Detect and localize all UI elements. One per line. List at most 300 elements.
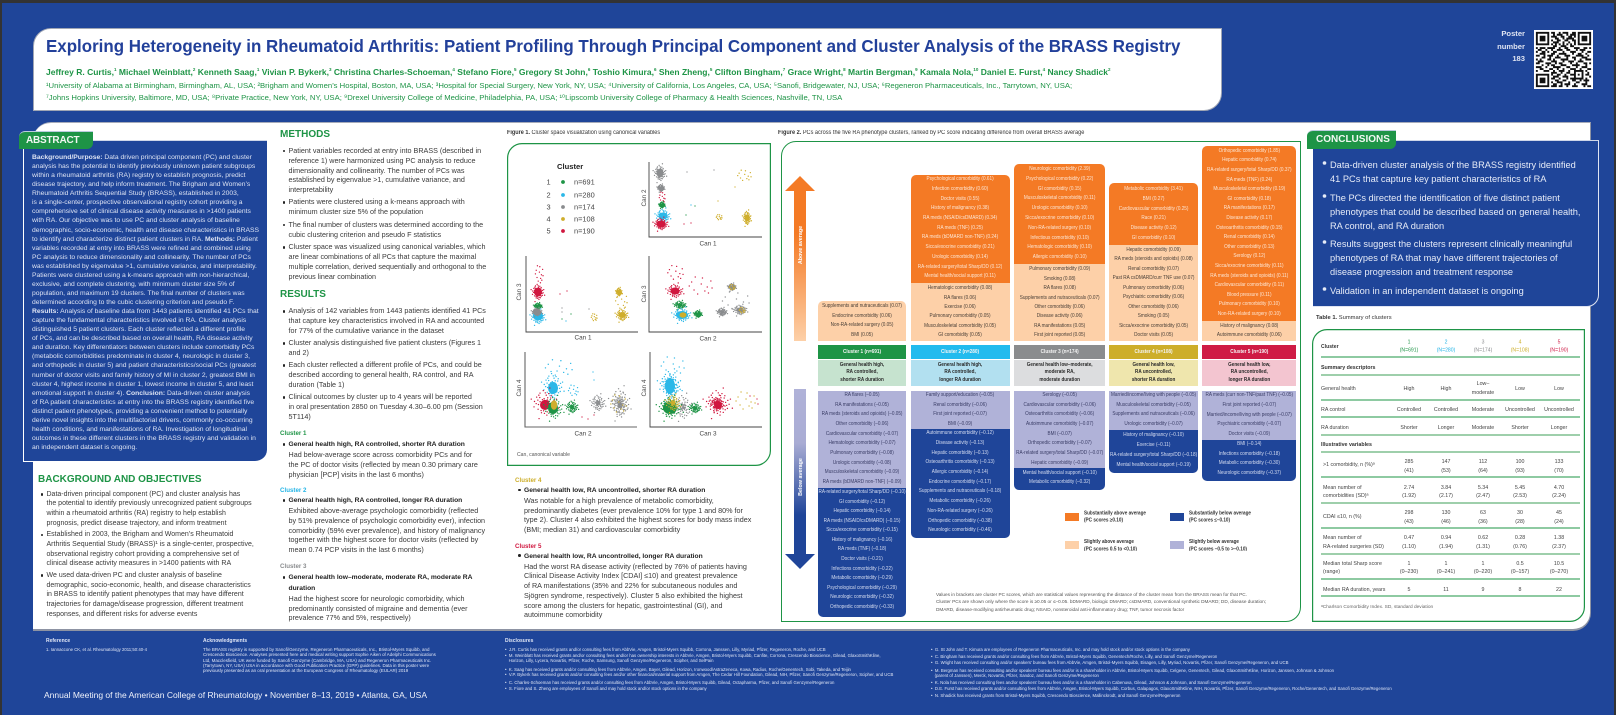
slightly above average PCs: Hepatic comorbidity (0.09) xyxy=(1126,247,1181,253)
summary descriptors: Moderate xyxy=(1472,407,1494,413)
bullet: objective: We used data-driven PC and cluster analysis of baseline xyxy=(46,572,222,579)
slightly above average PCs: Sicca/exocrine comorbidity (0.05) xyxy=(1119,323,1188,329)
slightly above average PCs: Smoking (0.05) xyxy=(1138,313,1169,319)
illustrative variables: (28) xyxy=(1515,519,1525,525)
illustrative variables: 100 xyxy=(1516,459,1524,465)
chart: can 4 vs can 3: Can 3 xyxy=(699,430,717,438)
substantially above average PCs xyxy=(911,175,1010,283)
figure 1 caption: Figure 1. Cluster space visualization using canonical variables xyxy=(507,130,660,136)
illustrative variables: 0.47 xyxy=(1404,535,1414,541)
legend: Substantially below average xyxy=(1189,511,1251,517)
bullet: cluster number: cubic clustering criterion and pseudo F statistics xyxy=(288,230,441,239)
bullet: predominantly diabetes (ever prevalence 10% for type 1 and 80% for xyxy=(524,506,743,515)
bullet: variables analysed: Analysis of 142 variables from 1443 patients identified 41 PCs xyxy=(288,306,486,315)
slightly above average PCs: Renal comorbidity (0.07) xyxy=(1128,266,1179,272)
abstract text: cluster 4, highest income in cluster 1, lowest income in cluster 5, and least xyxy=(32,381,253,388)
substantially above average PCs: RA manifestations (0.17) xyxy=(1223,205,1275,211)
substantially above average PCs: RA-related surgery/total Sharp/DD (0.37) xyxy=(1207,167,1291,173)
bullet: objective: responses, and different risks for adverse events xyxy=(46,611,197,618)
bullet: comorbidity (59% ever prevalence), and history of malignancy xyxy=(288,526,485,534)
slightly below average PCs: RA-related surgery/total Sharp/DD (–0.07) xyxy=(1016,450,1103,456)
disclosures column 1: • K. Saag has received grants and/or consulting fees from AbbVie, Amgen, Bayer, Gilead, Horizon, Ironwood/AstraZeneca, Kowa, Radius, Roche/Genentech, Sobi, Takeda, and Teijin xyxy=(505,667,851,672)
disclosures column 2: • C. Bingham has received grants and/or consulting fees from AbbVie, Bristol-Myers Squibb, Genentech/Roche, Lilly, and Sanofi Genzyme/Regeneron xyxy=(931,654,1217,659)
illustrative variables: (2.24) xyxy=(1552,493,1566,499)
slightly below average PCs: Hepatic comorbidity (–0.09) xyxy=(1031,460,1088,466)
bullet: outcomes xyxy=(288,392,483,422)
column: cluster 1 xyxy=(818,301,906,617)
slightly above average PCs: History of malignancy (0.08) xyxy=(1220,323,1278,329)
bullet: variables: interpretability xyxy=(288,185,333,194)
cluster descriptor: General health high, xyxy=(938,362,983,368)
substantially above average PCs: Non-RA-related surgery (0.10) xyxy=(1218,311,1280,317)
cluster descriptor xyxy=(1109,360,1198,386)
slightly below average PCs: Urologic comorbidity (–0.07) xyxy=(1124,421,1183,427)
illustrative variables: 3.84 xyxy=(1441,485,1451,491)
bullet 2: RA control, and RA duration xyxy=(1330,220,1444,230)
summary descriptors: Shorter xyxy=(1511,425,1529,431)
slightly below average PCs xyxy=(1014,391,1105,468)
bullet: registry subgroups: prognosis, predict disease trajectory, and inform treatment xyxy=(46,520,227,527)
slightly below average PCs: RA flares (–0.05) xyxy=(844,392,880,398)
abstract text: with RA. Our objective was to use PC and cluster analysis of baseline xyxy=(32,217,240,224)
chart: can 4 vs can 2: Can 2 xyxy=(574,430,592,438)
illustrative variables: 112 xyxy=(1479,459,1487,465)
cluster descriptor: longer RA duration xyxy=(1228,377,1270,383)
slightly above average PCs: Past RA csDMARD/curr TNF use (0.07) xyxy=(1113,275,1194,281)
bullet: variables: reference 1) were harmonized using PC analysis to reduce xyxy=(288,156,475,165)
cluster descriptor: General health low, xyxy=(1132,362,1175,368)
slightly above average PCs: Other comorbidity (0.06) xyxy=(1034,304,1085,310)
slightly below average PCs: Osteoarthritis comorbidity (–0.06) xyxy=(1025,411,1094,417)
illustrative variables: 9 xyxy=(1482,587,1485,593)
slightly below average PCs: Family support/education (–0.05) xyxy=(926,392,995,398)
legend: Cluster xyxy=(557,162,583,171)
bullet: duration xyxy=(288,585,315,592)
abstract text: within a rheumatoid arthritis (RA) registry to establish prognosis, predict xyxy=(32,172,245,179)
bullet: profiles: Each cluster reflected a different profile of PCs, and could be xyxy=(288,360,482,369)
poster number xyxy=(1497,29,1525,63)
substantially below average PCs: History of malignancy (–0.16) xyxy=(832,537,892,543)
bullet: objective: in BRASS to identify patient phenotypes that may have different xyxy=(46,591,244,598)
illustrative variables: (range) xyxy=(1323,569,1340,575)
substantially above average PCs: Race (0.21) xyxy=(1141,215,1166,221)
bullet: BRASS study xyxy=(46,530,254,569)
substantially below average PCs xyxy=(1109,430,1198,473)
summary descriptors: Low xyxy=(1554,386,1564,392)
bullet: Had the worst RA disease activity (reflected by 76% of patients having xyxy=(524,562,747,571)
substantially above average PCs: RA meds (NSAID/csDMARD) (0.34) xyxy=(923,215,998,221)
cluster header xyxy=(911,345,1010,359)
illustrative variables: 63 xyxy=(1480,510,1486,516)
slightly below average PCs: Psychiatric comorbidity (–0.07) xyxy=(1217,421,1281,427)
slightly above average PCs: BMI (0.05) xyxy=(851,332,873,338)
legend: Substantially above average xyxy=(1084,511,1146,517)
illustrative variables: 133 xyxy=(1555,459,1563,465)
arrow: above average xyxy=(785,176,815,341)
slightly below average PCs: Married/income/living with people (–0.05) xyxy=(1111,392,1196,398)
substantially below average PCs: Sicca/exocrine comorbidity (–0.15) xyxy=(826,527,898,533)
substantially below average PCs: Doctor visits (–0.21) xyxy=(841,556,883,562)
bullet 3: phenotypes of RA that may have different trajectories of xyxy=(1330,253,1558,263)
slightly above average PCs: Pulmonary comorbidity (0.05) xyxy=(930,313,991,319)
text xyxy=(203,647,436,673)
bullet: registry subgroups: the potential to identify previously unrecognized patient subgroups xyxy=(46,500,252,507)
substantially below average PCs xyxy=(1202,440,1296,481)
bullet: Had the highest score for neurologic comorbidity, which xyxy=(288,594,465,603)
header row: (N=691) xyxy=(1400,348,1419,354)
bullet: objective: trajectories for damage/disease progression, different treatment xyxy=(46,601,243,608)
cluster header xyxy=(1202,345,1296,359)
arrow: below average: Below average xyxy=(798,458,804,496)
summary descriptors: Low xyxy=(1515,386,1525,392)
slightly above average PCs: Autoimmune comorbidity (0.06) xyxy=(1217,332,1281,338)
illustrative variables: 0.94 xyxy=(1441,535,1451,541)
bullet: Clinical Disease Activity Index [CDAI] ≤10) and greatest prevalence xyxy=(524,571,738,580)
substantially below average PCs: BMI (–0.14) xyxy=(1237,441,1261,447)
bullet xyxy=(524,485,751,535)
column: cluster 3 xyxy=(1014,164,1105,490)
slightly below average PCs: RA meds (steroids and opioids) (–0.05) xyxy=(822,411,902,417)
substantially above average PCs xyxy=(1202,146,1296,321)
slightly above average PCs: Smoking (0.08) xyxy=(1044,276,1075,282)
illustrative variables: 0.5 xyxy=(1516,561,1524,567)
heading: Reference xyxy=(46,638,70,644)
abstract text: number of doctor visits and family history of MI in cluster 2, greatest BMI in xyxy=(32,372,255,378)
bullet: by 51% prevalence of psychologic comorbidity ever), infection xyxy=(288,516,485,525)
substantially above average PCs: Urologic comorbidity (0.14) xyxy=(933,254,988,260)
slightly below average PCs: First joint reported (–0.07) xyxy=(1222,402,1276,408)
substantially above average PCs: Disease activity (0.12) xyxy=(1131,225,1176,231)
illustrative variables: (1.31) xyxy=(1476,544,1490,550)
summary descriptors: High xyxy=(1404,386,1414,392)
substantially above average PCs: Allergic comorbidity (0.10) xyxy=(1033,254,1086,260)
bullet: (BMI; median 31) and cardiovascular comorbidity xyxy=(524,525,680,534)
legend: n=691 xyxy=(574,178,595,187)
bullet 3: Results suggest the clusters represent clinically meaningful xyxy=(1330,238,1572,248)
substantially below average PCs: RA meds (TNF) (–0.18) xyxy=(838,546,886,552)
illustrative variables: 45 xyxy=(1556,510,1562,516)
bullet: physician [PCP] visits in the last 6 months) xyxy=(288,470,424,478)
heading: Disclosures xyxy=(505,638,533,644)
substantially below average PCs: Allergic comorbidity (–0.14) xyxy=(932,469,989,475)
substantially above average PCs: Infection comorbidity (0.60) xyxy=(932,186,989,192)
summary descriptors: Controlled xyxy=(1397,407,1421,413)
illustrative variables: Mean number of xyxy=(1323,535,1362,541)
disclosures column 1: • M. Weinblatt has received grants and/or consulting fees and/or has ownership interests in AbbVie, Amgen, Bristol-Myers Squibb, Canfite, Corrona, Crescendo Bioscience, Gilead, GlaxoSmithKline, xyxy=(505,653,881,658)
illustrative variables: 1.38 xyxy=(1554,535,1564,541)
bullet: predominantly consisted of migraine and dementia (ever xyxy=(288,604,468,612)
illustrative variables: 11 xyxy=(1443,587,1449,593)
legend: 3 xyxy=(546,203,551,212)
chart: can 3 vs can 1: Can 1 xyxy=(574,334,592,342)
slightly above average PCs: GI comorbidity (0.05) xyxy=(939,332,982,338)
substantially above average PCs: GI comorbidity (0.18) xyxy=(1227,196,1271,202)
slightly below average PCs: Cardiovascular comorbidity (–0.07) xyxy=(826,431,898,437)
substantially above average PCs: RA meds (bDMARD non-TNF) (0.24) xyxy=(922,234,999,240)
substantially above average PCs: History of malignancy (0.38) xyxy=(931,205,990,211)
abstract text: disease trajectory, and help inform treatment. The Brigham and Women’s xyxy=(32,181,250,188)
summary descriptors: Longer xyxy=(1551,425,1567,431)
substantially below average PCs: RA meds (NSAID/csDMARD) (–0.15) xyxy=(824,518,900,524)
substantially below average PCs: RA-related surgery/total Sharp/DD (–0.18) xyxy=(1110,452,1197,458)
bullet: canonical variables: Cluster space was visualized using canonical variables, which xyxy=(288,242,485,251)
cluster header xyxy=(818,345,906,359)
illustrative variables: 30 xyxy=(1517,510,1523,516)
substantially below average PCs: Infections comorbidity (–0.18) xyxy=(1218,451,1280,457)
substantially below average PCs: RA-related surgery/total Sharp/DD (–0.10) xyxy=(818,489,906,495)
illustrative variables: 1 xyxy=(1408,561,1411,567)
bullet: outcomes: in oral presentation 2850 on Tuesday 4.30–6.00 pm (Session xyxy=(288,402,483,411)
substantially above average PCs: Serology (0.12) xyxy=(1233,253,1265,259)
summary descriptors: Moderate xyxy=(1472,425,1494,431)
illustrative variables: 22 xyxy=(1556,587,1562,593)
summary descriptors: General health xyxy=(1321,386,1356,392)
disclosures column 2: • M. Bergman has received consulting and/or speakers’ bureau fees and/or is a shareholder in AbbVie, Bristol-Myers Squibb, Celgene, Genentech, Gilead, GlaxoSmithKline, Horizon, Janssen, Johnson & Johnson xyxy=(931,668,1334,672)
slightly above average PCs xyxy=(1202,321,1296,341)
slightly below average PCs: BMI (–0.07) xyxy=(1047,431,1072,437)
bullet: Was notable for a high prevalence of metabolic comorbidity, xyxy=(524,496,714,505)
cluster descriptor: General health high, xyxy=(840,362,884,368)
bullet: the PC of doctor visits (reflected by mean 0.30 primary care xyxy=(288,460,478,469)
substantially above average PCs: Cardiovascular comorbidity (0.11) xyxy=(1214,282,1284,288)
bullet: mean 0.74 PCP visits in the last 6 months) xyxy=(288,545,424,554)
heading: RESULTS xyxy=(280,289,326,300)
substantially below average PCs: Mental health/social support (–0.19) xyxy=(1116,462,1191,468)
conclusions heading tab: CONCLUSIONS xyxy=(1316,134,1390,145)
substantially above average PCs: GI comorbidity (0.10) xyxy=(1132,235,1175,241)
slightly below average PCs: Cardiovascular comorbidity (–0.06) xyxy=(1023,402,1096,408)
substantially above average PCs: Disease activity (0.17) xyxy=(1226,215,1272,221)
disclosures column 1: • J.R. Curtis has received grants and/or consulting fees from AbbVie, Amgen, Bristol-Myers Squibb, Corrona, Janssen, Lilly, Myriad, Pfizer, Regeneron, Roche, and UCB xyxy=(505,647,826,652)
bullet: canonical variables: multiple correlation, derived sequentially and orthogonal to the xyxy=(288,262,486,271)
illustrative variables: (70) xyxy=(1554,468,1564,474)
column: cluster 2 xyxy=(911,175,1010,538)
bullet: Exhibited above-average psychologic comorbidity (reflected xyxy=(288,506,478,515)
slightly above average PCs: Doctor visits (0.05) xyxy=(1134,332,1173,338)
conclusions heading tab xyxy=(1307,130,1396,149)
abstract text: and duration. Key differentiators between clusters include comorbidity PCs xyxy=(32,344,254,351)
slightly below average PCs: BMI (–0.09) xyxy=(948,421,973,427)
slightly above average PCs xyxy=(1109,245,1198,341)
illustrative variables: comorbidities (SD)ᵃ xyxy=(1323,493,1369,499)
abstract text: was established by eigenvalue >1, cumulative variance, and interpretability. xyxy=(32,263,257,270)
bullet: BRASS study: Established in 2003, the Brigham and Women’s Rheumatoid xyxy=(46,531,233,538)
slightly below average PCs xyxy=(911,391,1010,429)
abstract text: derive novel insights into the multifactorial drivers, commonly co-occurring xyxy=(32,417,253,424)
cluster descriptor: RA uncontrolled, xyxy=(1230,369,1268,375)
section: results xyxy=(280,289,486,421)
table footnote: ᵃCharlson Comorbidity Index. SD, standard deviation xyxy=(1321,604,1434,610)
header row: 2 xyxy=(1445,340,1448,346)
substantially above average PCs: Metabolic comorbidity (3.41) xyxy=(1124,186,1183,192)
illustrative variables: 0.62 xyxy=(1478,535,1488,541)
bullet: General health high, RA controlled, longer RA duration xyxy=(288,497,462,504)
illustrative variables: (1.94) xyxy=(1439,544,1453,550)
substantially above average PCs: Psychological comorbidity (0.22) xyxy=(1026,176,1093,182)
illustrative variables: 4.70 xyxy=(1554,485,1564,491)
cluster 2 description xyxy=(280,487,485,554)
legend: 1 xyxy=(546,178,551,187)
bullet: variables analysed xyxy=(288,306,486,336)
cluster 1 description xyxy=(280,430,478,478)
bullet: General health low–moderate, moderate RA, moderate RA xyxy=(288,574,472,581)
abstract text: emotional support in cluster 4). Conclusion: Data-driven cluster analysis xyxy=(32,390,250,397)
summary descriptors: Longer xyxy=(1438,425,1454,431)
substantially below average PCs: Non-RA-related surgery (–0.26) xyxy=(928,508,993,514)
abstract text: Patients were clustered using a k-means approach with non-hierarchical, xyxy=(32,272,249,279)
abstract text: of PCs, and can be described based on overall health, RA disease activity xyxy=(32,335,253,342)
bullet 3 xyxy=(1330,238,1572,277)
summary descriptors: Controlled xyxy=(1434,407,1458,413)
legend xyxy=(546,162,595,236)
summary descriptors: Uncontrolled xyxy=(1544,407,1574,413)
disclosures column 2: • D.E. Furst has received grants and/or consulting fees from AbbVie, Amgen, Bristol-Myers Squibb, Corbus, Galapagos, GlaxoSmithKline, NIH, Novartis, Pfizer, Sanofi Genzyme/Regeneron, Roche/Genentech, and Sanofi Genzyme/Regeneron xyxy=(931,686,1392,691)
illustrative variables: 5.45 xyxy=(1515,485,1525,491)
illustrative variables: >1 comorbidity, n (%)ᵃ xyxy=(1323,462,1375,468)
illustrative variables: Illustrative variables xyxy=(1321,442,1372,448)
conclusions bullets: Data-driven cluster analysis of the BRASS registry identified xyxy=(1330,160,1576,170)
chart: can 3 vs can 2: Can 3 xyxy=(641,285,648,303)
substantially above average PCs: Non-RA-related surgery (0.10) xyxy=(1028,225,1091,231)
footer: reference xyxy=(46,638,147,652)
substantially below average PCs xyxy=(911,429,1010,538)
substantially above average PCs: Sicca/exocrine comorbidity (0.10) xyxy=(1025,215,1094,221)
panel: abstract xyxy=(23,140,267,462)
disclosures column 2: • G. Wright has received consulting and/or speakers’ bureau fees from AbbVie, Amgen, Bristol-Myers Squibb, Eisagen, Lilly, Myriad, Novartis, Pfizer, Sanofi Genzyme/Regeneron, and UCB xyxy=(931,660,1288,665)
illustrative variables: (0–270) xyxy=(1550,569,1568,575)
disclosures column 1: • V.P. Bykerk has received grants and/or consulting fees and/or other financial/material support from Amgen, The Cedar Hill Foundation, Gilead, NIH, Pfizer, Sanofi Genzyme/Regeneron, Scipher, and UCB xyxy=(505,672,893,677)
abstract text: is a single-center, prospective observational registry cohort providing a xyxy=(32,199,242,206)
bullet 2: phenotypes that could be described based on general health, xyxy=(1330,206,1580,216)
substantially above average PCs xyxy=(1014,164,1105,264)
cluster descriptor xyxy=(1014,360,1105,386)
illustrative variables: 298 xyxy=(1405,510,1413,516)
title panel xyxy=(33,28,1222,111)
cluster header: Cluster 2 (n=280) xyxy=(941,349,980,355)
slightly above average PCs xyxy=(911,283,1010,341)
disclosures column 2: • K. Nola has received consulting fees and/or speakers’ bureau fees and/or is a shareholder in Cabenuva, Gilead, Johnson & Johnson, and Sanofi Genzyme/Regeneron xyxy=(931,680,1251,685)
bullet: canonical variables xyxy=(288,242,486,281)
conclusions bullets xyxy=(1330,160,1576,184)
table 1 caption: Table 1. Summary of clusters xyxy=(1316,315,1392,321)
summary descriptors: Uncontrolled xyxy=(1505,407,1535,413)
cluster 5 description xyxy=(515,543,747,619)
bullet: five clusters: Cluster analysis distinguished five patient clusters (Figures 1 xyxy=(288,338,481,347)
abstract text: health conditions, and manifestations of RA. Investigation of longitudinal xyxy=(32,426,247,433)
illustrative variables: (1.10) xyxy=(1402,544,1416,550)
abstract text: population, and maximum 19 clusters. The final number of clusters was xyxy=(32,290,245,297)
figure 2 footnote: Cluster PCs are shown only where the score is ≥0.05 or ≤–0.05. bDMARD, biologic DMARD; csDMARD, conventional synthetic DMARD; DD, disease duration; xyxy=(936,599,1266,604)
slightly below average PCs: Pulmonary comorbidity (–0.08) xyxy=(830,450,894,456)
disclosures column 2: • N. Shadick has received grants from Bristol-Myers Squibb, Crescendo Bioscience, Mallinckrodt, and Sanofi Genzyme/Regeneron xyxy=(931,693,1180,698)
substantially below average PCs: Disease activity (–0.13) xyxy=(936,440,985,446)
substantially below average PCs: Orthopedic comorbidity (–0.33) xyxy=(830,604,894,610)
bullet: BRASS study: observational registry cohort providing a comprehensive set of xyxy=(46,551,239,558)
section: methods xyxy=(280,129,486,280)
table rules xyxy=(1321,357,1580,596)
cluster descriptor: RA uncontrolled, xyxy=(1135,369,1172,375)
text: Crescendo Bioscience. Analyses presented here and medical writing support Sophie Aiken of Adelphi Communications xyxy=(203,652,436,657)
illustrative variables: (0–241) xyxy=(1437,569,1455,575)
abstract text: comprehensive set of clinical disease activity measures in >1400 patients xyxy=(32,208,251,215)
bullet: profiles xyxy=(288,360,482,390)
legend xyxy=(1065,510,1251,551)
bullet: score among the clusters for hepatic, gastrointestinal (GI), and xyxy=(524,600,723,610)
illustrative variables: 10.5 xyxy=(1554,561,1564,567)
bullet: registry subgroups: within a rheumatoid arthritis (RA) registry to help establish xyxy=(46,510,226,517)
header row: Cluster xyxy=(1321,344,1339,350)
header row: (N=174) xyxy=(1474,348,1493,354)
bullet markers xyxy=(1322,161,1326,291)
illustrative variables: (0.76) xyxy=(1513,544,1527,550)
cluster descriptor: General health low, xyxy=(1228,362,1270,368)
substantially below average PCs: Metabolic comorbidity (–0.32) xyxy=(1029,479,1090,485)
slightly below average PCs: Urologic comorbidity (–0.08) xyxy=(833,460,891,466)
header row: 1 xyxy=(1408,340,1411,346)
illustrative variables: 130 xyxy=(1442,510,1450,516)
abstract text: outcomes in these different clusters in the BRASS registry and validation in xyxy=(32,435,256,442)
disclosures column 2 xyxy=(931,647,1392,698)
legend: (PC scores ≥0.10) xyxy=(1084,518,1123,524)
abstract text: analysis has the potential to identify previously unknown patient subgroups xyxy=(32,163,255,170)
slightly above average PCs: Supplements and nutraceuticals (0.07) xyxy=(1020,295,1099,301)
poster number: number xyxy=(1497,42,1525,50)
chart: can 3 vs can 1: Can 3 xyxy=(516,283,523,301)
substantially above average PCs: RA meds (TNF) (0.24) xyxy=(1226,177,1272,183)
substantially above average PCs: Neurologic comorbidity (2.39) xyxy=(1029,166,1090,172)
section: background and objectives xyxy=(38,474,254,618)
illustrative variables: 285 xyxy=(1405,459,1413,465)
slightly below average PCs: Doctor visits (–0.09) xyxy=(1228,431,1270,437)
bullet: variables analysed: that capture key characteristics involved in RA and accounted xyxy=(288,316,484,325)
disclosures column 1: • S. Fiore and S. Zheng are employees of Sanofi and may hold stock and/or stock options in the company xyxy=(505,686,707,691)
illustrative variables: 5 xyxy=(1408,587,1411,593)
bullet xyxy=(524,551,747,620)
chart: can 4 vs can 2: Can 4 xyxy=(516,379,523,397)
legend: Slightly above average xyxy=(1084,539,1134,545)
bullet: cluster number xyxy=(288,220,483,240)
cluster header: Cluster 4 (n=108) xyxy=(1134,349,1173,355)
cluster descriptor: shorter RA duration xyxy=(1132,377,1175,383)
title: Exploring Heterogeneity in Rheumatoid Arthritis: Patient Profiling Through Principal Component and Cluster Analysis of the BRASS Registry xyxy=(46,36,1180,56)
heading: Cluster 3 xyxy=(280,563,306,570)
header row: 3 xyxy=(1482,340,1485,346)
slightly above average PCs: Other comorbidity (0.06) xyxy=(1128,304,1179,310)
conclusions bullets: 41 PCs that capture key patient characteristics of RA xyxy=(1330,174,1546,184)
legend: (PC scores ≤–0.10) xyxy=(1189,518,1230,524)
chart: can 3 vs can 2 xyxy=(641,256,762,342)
disclosures column 1: • C. Charles-Schoeman has received grants and/or consulting fees from AbbVie, Amgen, Bristol-Myers Squibb, Gilead, Octapharma, Pfizer, and Sanofi Genzyme/Regeneron xyxy=(505,680,834,685)
abstract text: determined according to the cubic clustering criterion and pseudo F. xyxy=(32,299,234,306)
cluster descriptor: RA controlled, xyxy=(945,369,976,375)
abstract text: demographic, socio-economic, health and disease characteristics in BRASS xyxy=(32,226,259,234)
bullet: variables xyxy=(288,146,481,195)
summary descriptors: Shorter xyxy=(1400,425,1418,431)
illustrative variables: 8 xyxy=(1519,587,1522,593)
slightly below average PCs: Married/income/living with people (–0.07) xyxy=(1206,412,1292,418)
affiliations: ⁷Johns Hopkins University, Baltimore, MD, USA; ⁸Private Practice, New York, NY, USA; ⁹Drexel University College of Medicine, Philadelphia, PA, USA; ¹⁰Lipscomb University College of Pharmacy & Health Sciences, Nashville, TN, USA xyxy=(46,93,842,102)
bullet 4: Validation in an independent dataset is ongoing xyxy=(1330,286,1524,296)
bullet: General health low, RA uncontrolled, shorter RA duration xyxy=(524,487,705,494)
substantially above average PCs: RA-related surgery/total Sharp/DD (0.12) xyxy=(918,264,1003,270)
slightly below average PCs xyxy=(1109,391,1198,430)
illustrative variables: (2.37) xyxy=(1552,544,1566,550)
cluster header: Cluster 3 (n=174) xyxy=(1040,349,1079,355)
chart: can 3 vs can 1 xyxy=(516,256,638,342)
abstract text: variables recorded at entry into BRASS were refined and combined using xyxy=(32,245,251,252)
heading: Acknowledgments xyxy=(203,638,247,644)
substantially above average PCs: Doctor visits (0.55) xyxy=(941,196,980,202)
